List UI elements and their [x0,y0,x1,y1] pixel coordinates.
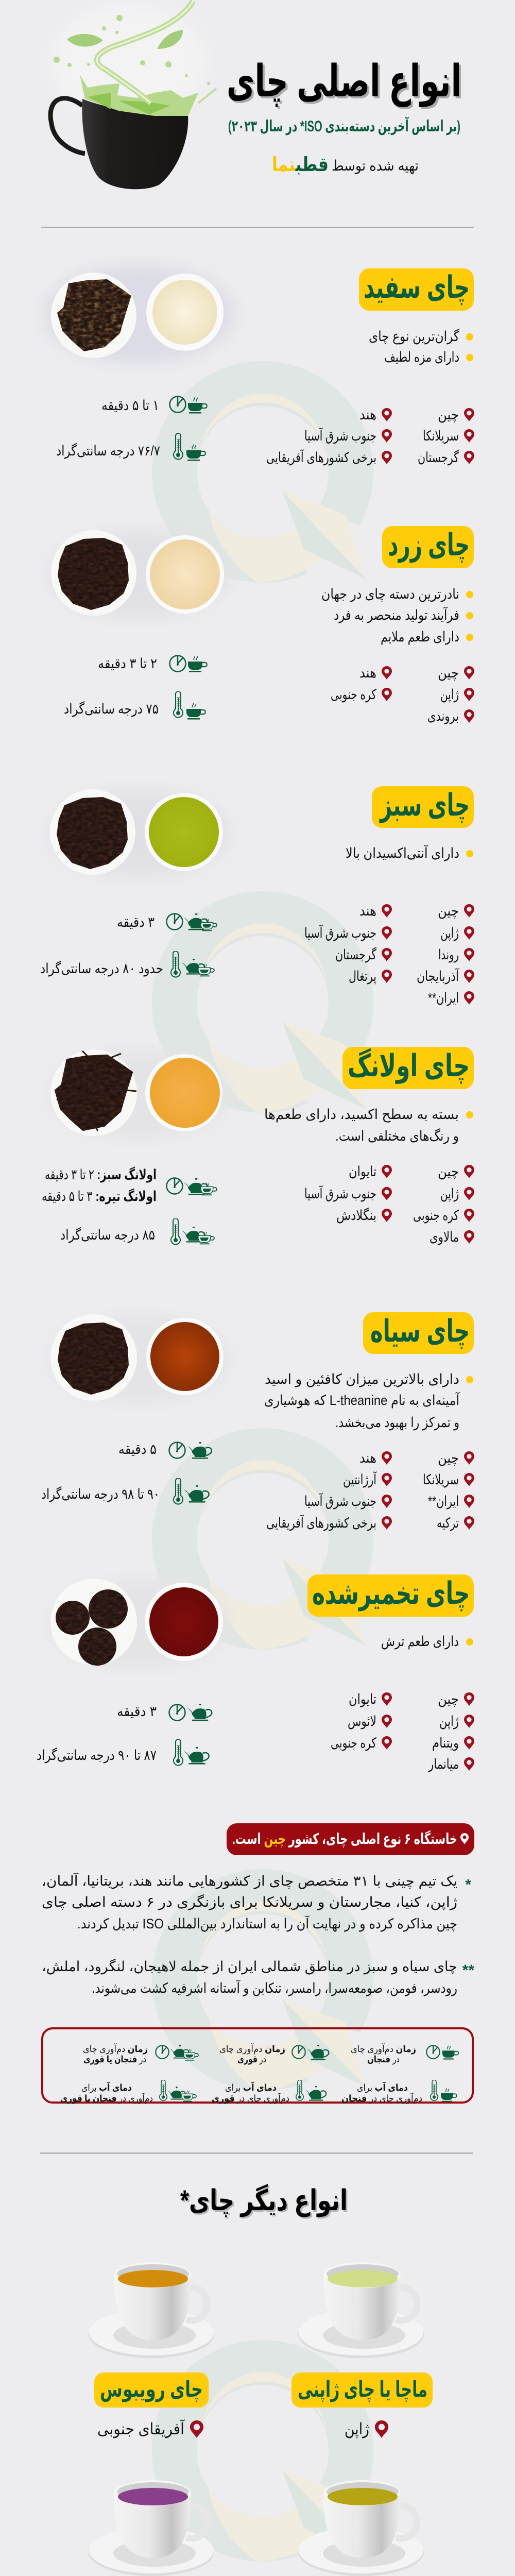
legend: brew time in cup or teapot [83,2043,198,2065]
bullet: و تمرکز را بهبود می‌بخشد. [335,1415,459,1431]
bullets: گران‌ترین نوع چای [369,328,459,345]
origin countries: جنوب شرق آسیا [304,428,376,444]
note: ISO background: * [465,1876,471,1893]
origin countries: تایوان [349,1691,376,1707]
brew time and temperature: ۳ دقیقه [117,1704,157,1719]
origin countries: کره جنوبی [413,1208,459,1224]
origin countries: پرتغال [349,969,376,985]
brew time and temperature: ۱ تا ۵ دقیقه [101,398,159,413]
brew time and temperature: اولانگ سبز: ۲ تا ۳ دقیقه [45,1166,157,1183]
origin countries: چین [438,1691,459,1707]
origin countries: هند [359,407,376,422]
legend: water temperature in teapot: دم‌آوری چای در قوری [212,2092,289,2104]
panel: rooibos: چای رویبوس [100,2377,203,2402]
panel: rooibos [89,2262,214,2438]
origin countries: ژاپن [440,687,459,703]
brew time and temperature [40,912,217,977]
credit line with logo: تهیه شده توسط [332,158,419,174]
panel: matcha: ماچا یا چای ژاپنی [298,2377,427,2402]
note: tea cultivation in Iran [42,1958,474,1996]
bullet: دارای طعم ترش [381,1634,459,1650]
legend: brew time in cup or teapot: زمان دم‌آوری چای [83,2043,148,2055]
origin countries: ایران** [428,1494,459,1510]
bullet [264,1371,473,1431]
brew time and temperature [56,397,207,461]
brew time and temperature: اولانگ تیره: ۳ تا ۵ دقیقه [42,1188,157,1205]
legend: water temperature in cup: دم‌آوری چای در فنجان [341,2092,422,2104]
illustration: cup of matcha [298,2262,424,2358]
origin countries: ایران** [428,990,459,1006]
bullets: دارای طعم ملایم [381,629,459,645]
bullets [321,586,473,645]
heading pill [372,786,474,828]
section: black tea [41,1312,474,1531]
origin countries: بنگلادش [336,1207,376,1223]
note: tea cultivation in Iran: رودسر، فومن، صومعه‌سرا، رامسر، تنکابن و آستانه اشرفیه کشت می‌شوند. [92,1980,457,1996]
origin countries: جنوب شرق آسیا [304,925,376,941]
legend: water temperature in cup or teapot: دم‌آوری در فنجان یا قوری [60,2092,153,2104]
illustration: cup of purple tea [89,2480,214,2576]
origin countries [304,903,474,1006]
section: white tea [44,265,474,466]
legend: brew time in teapot: زمان دم‌آوری چای [219,2043,285,2055]
brew time and temperature: ۸۷ تا ۹۰ درجه سانتی‌گراد [37,1747,157,1764]
legend box [42,2028,473,2104]
origin countries: چین [438,1164,459,1180]
origin countries: هند [359,1450,376,1466]
tea photos: green tea leaves and cup [49,789,229,877]
note: tea cultivation in Iran: ** [462,1962,474,1979]
hero illustration: black mug with green tea splash [50,1,216,189]
heading pill [359,268,474,311]
origin countries: برخی کشورهای آفریقایی [266,449,376,466]
legend: water temperature in teapot: دمای آب برای [225,2081,277,2093]
heading pill [363,1312,474,1354]
legend: water temperature in cup [341,2080,457,2104]
section: yellow tea [49,526,474,724]
note: ISO background: چین مذاکره کرده و در نهایت آن را به استاندارد بین‌المللی ISO تبدیل کردند. [77,1916,457,1932]
origin countries: ویتنام [432,1735,459,1751]
bullets: دارای مزه لطیف [384,349,459,365]
origin countries: لائوس [348,1714,376,1730]
legend: brew time in teapot: در قوری [237,2054,266,2065]
origin countries [331,665,474,724]
origin countries: سریلانکا [423,1472,459,1488]
legend: brew time in teapot [219,2043,329,2065]
brew time and temperature [42,1166,217,1244]
note: ISO background [42,1873,471,1932]
origin countries: ترکیه [437,1515,459,1531]
credit line with logo: قطبنما [272,154,329,176]
illustration: cup of mate [298,2480,424,2576]
origin countries: چین [438,1450,459,1466]
legend: water temperature in teapot [212,2080,326,2104]
heading pill [342,1047,474,1089]
brew time and temperature: ۸۵ درجه سانتی‌گراد [60,1227,155,1243]
panel: matcha: ژاپن [345,2420,369,2438]
origin countries: کره جنوبی [331,687,376,703]
bullet: دارای بالاترین میزان کافئین و اسید [265,1371,459,1387]
heading pill: چای زرد [388,528,470,563]
bullets: فرآیند تولید منحصر به فرد [334,607,459,623]
origin countries: ژاپن [440,925,459,941]
origin countries: برخی کشورهای آفریقایی [266,1515,376,1531]
brew time and temperature [41,1441,212,1504]
origin countries: سریلانکا [423,428,459,444]
origin countries: کره جنوبی [331,1735,376,1751]
section: green tea [40,786,474,1006]
credit line with logo [272,154,419,176]
section: oolong tea [42,1047,474,1245]
origin countries [304,1164,474,1245]
legend: brew time in cup [351,2043,458,2064]
heading pill [382,526,474,568]
note: ISO background: یک تیم چینی با ۳۱ متخصص چای از کشورهایی مانند هند، بریتانیا، آلمان، [42,1873,457,1889]
bullet [264,1107,473,1144]
heading pill: چای سبز [379,788,470,823]
origin countries: آرژانتین [343,1471,377,1488]
heading: other tea types: انواع دیگر چای* [180,2184,348,2217]
bullets [369,328,473,365]
legend: water temperature in cup: دمای آب برای [357,2081,408,2093]
watermark logos [152,361,373,2562]
brew time and temperature: ۳ دقیقه [117,914,154,930]
brew time and temperature: ۹۰ تا ۹۸ درجه سانتی‌گراد [41,1486,160,1502]
origin countries: تایوان [349,1164,376,1180]
origin countries: مالاوی [430,1229,459,1245]
brew time and temperature: ۷۶/۷ درجه سانتی‌گراد [56,443,160,459]
panel: purple tea [89,2480,214,2576]
origin countries: بروندی [427,708,459,724]
legend: brew time in cup: در فنجان [367,2054,400,2064]
origin countries [331,1691,474,1772]
origin countries: جنوب شرق آسیا [304,1493,376,1510]
brew time and temperature [64,655,207,719]
bullet: آمینه‌ای به نام L-theanine که هوشیاری [264,1392,460,1409]
origin countries: آذربایجان [417,968,459,985]
callout: origin of the six tea types [227,1823,474,1855]
bullet: بسته به سطح اکسید، دارای طعم‌ها [264,1107,459,1123]
bullets: دارای آنتی‌اکسیدان بالا [346,845,459,861]
origin countries: ژاپن [439,1714,459,1730]
origin countries: ژاپن [440,1186,459,1202]
legend: brew time in cup: زمان دم‌آوری چای [351,2043,416,2055]
panel: mate [293,2480,429,2576]
tea photos: black tea leaves and cup [49,1314,229,1403]
origin countries [266,407,474,466]
origin countries: هند [359,665,376,681]
origin countries: گرجستان [418,449,459,466]
note: tea cultivation in Iran: چای سیاه و سبز در مناطق شمالی ایران از جمله لاهیجان، لنگرود، املش، [42,1958,457,1975]
panel: matcha [291,2262,433,2438]
bullet: و رنگ‌های مختلفی است. [335,1128,459,1144]
origin countries: جنوب شرق آسیا [304,1185,376,1202]
tea photos: yellow tea leaves and cup [49,530,229,618]
origin countries: هند [359,903,376,919]
origin countries: گرجستان [335,946,376,963]
heading pill: چای سیاه [370,1314,470,1349]
origin countries: روندا [438,947,459,963]
tea photos: oolong tea leaves and cup [49,1049,229,1139]
origin countries: میانمار [427,1756,459,1772]
tea photos: white tea leaves and cup [44,265,234,363]
brew time and temperature: حدود ۸۰ درجه سانتی‌گراد [40,960,163,977]
panel: rooibos: آفریقای جنوبی [97,2419,185,2438]
brew time and temperature: ۲ تا ۳ دقیقه [98,656,157,671]
illustration: cup of rooibos [89,2262,214,2358]
tea photos: fermented tea balls and cup [49,1579,229,1668]
legend: water temperature in cup or teapot [60,2080,196,2104]
heading pill: چای سفید [364,270,470,306]
bullets: نادرترین دسته چای در جهان [321,586,459,602]
origin countries [266,1450,474,1531]
section: fermented tea [37,1574,474,1772]
callout: origin of the six tea types: خاستگاه ۶ نوع اصلی چای، کشور چین است. [232,1830,457,1848]
heading pill: چای اولانگ [348,1048,470,1084]
origin countries: چین [438,407,459,423]
brew time and temperature: ۵ دقیقه [118,1442,157,1457]
legend: water temperature in cup or teapot: دمای آب برای [81,2081,132,2093]
origin countries: چین [438,665,459,681]
brew time and temperature: ۷۵ درجه سانتی‌گراد [64,701,159,717]
note: ISO background: ژاپن، کنیا، مجارستان و سریلانکا برای بازنگری در ۶ دسته اصلی چای [42,1894,457,1910]
heading pill [307,1574,474,1617]
legend: brew time in cup or teapot: در فنجان یا قوری [83,2054,146,2065]
origin countries: چین [438,903,459,919]
brew time and temperature [37,1703,212,1765]
